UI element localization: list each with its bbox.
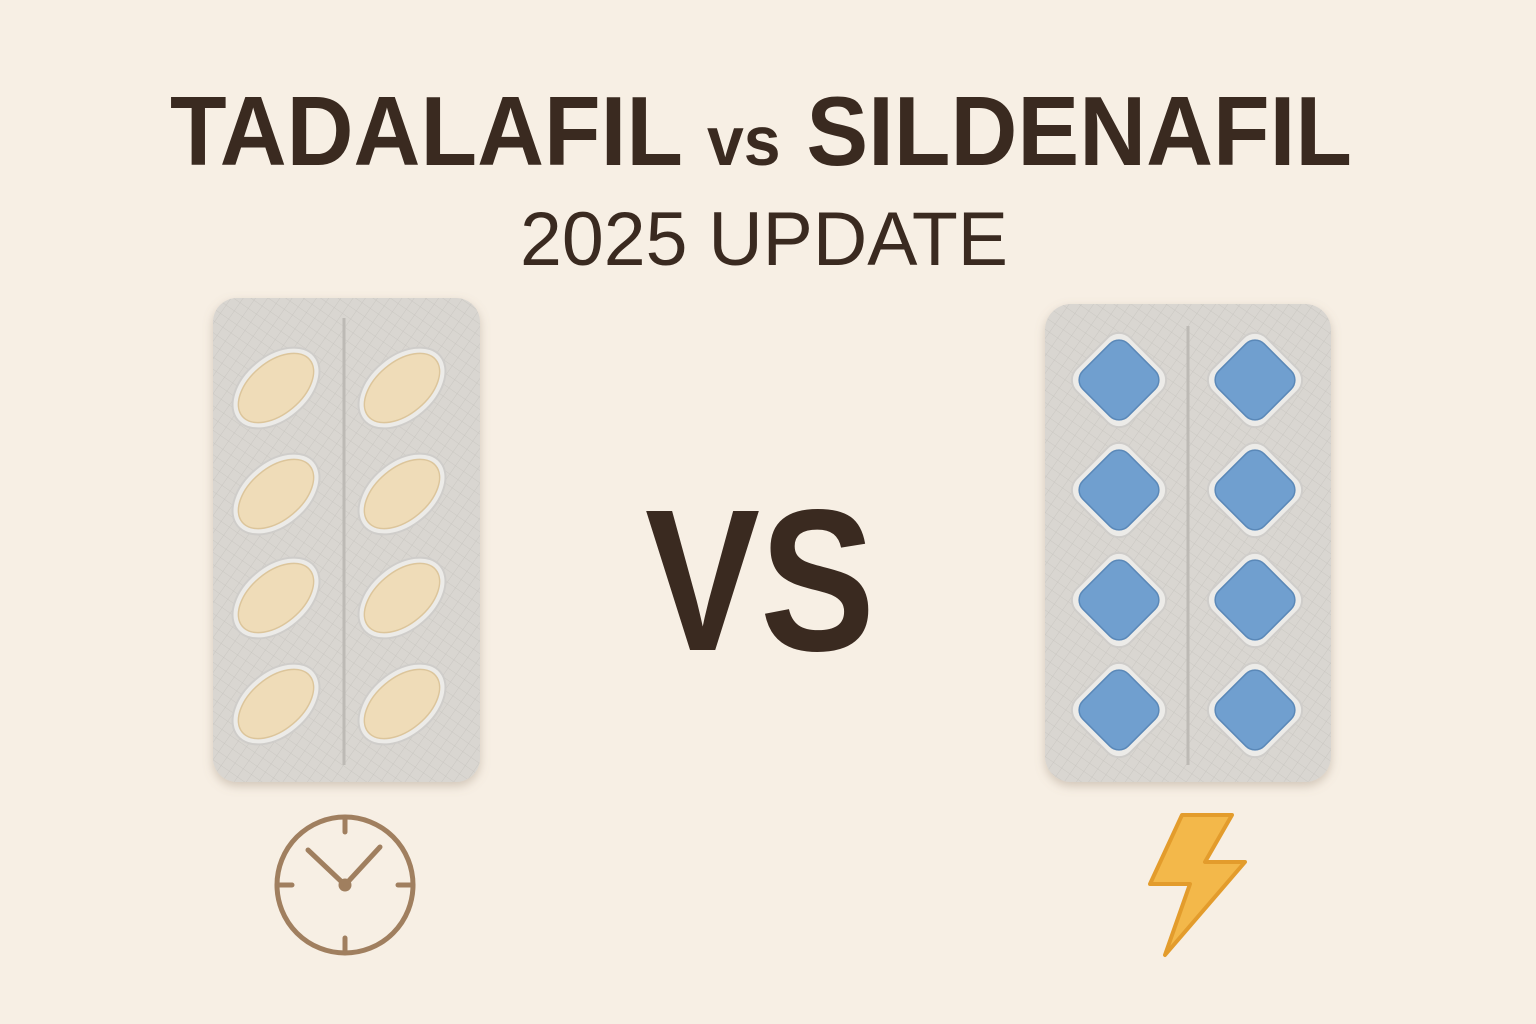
subtitle: 2025 UPDATE [520, 197, 1008, 282]
panel: tadalafil blister [213, 298, 480, 782]
icon: lightning bolt [1150, 815, 1245, 955]
title: TADALAFIL vs SILDENAFIL [170, 76, 1352, 186]
panel: sildenafil blister [1045, 304, 1331, 782]
VS text: VS [645, 467, 875, 693]
icon: clock [277, 817, 413, 953]
